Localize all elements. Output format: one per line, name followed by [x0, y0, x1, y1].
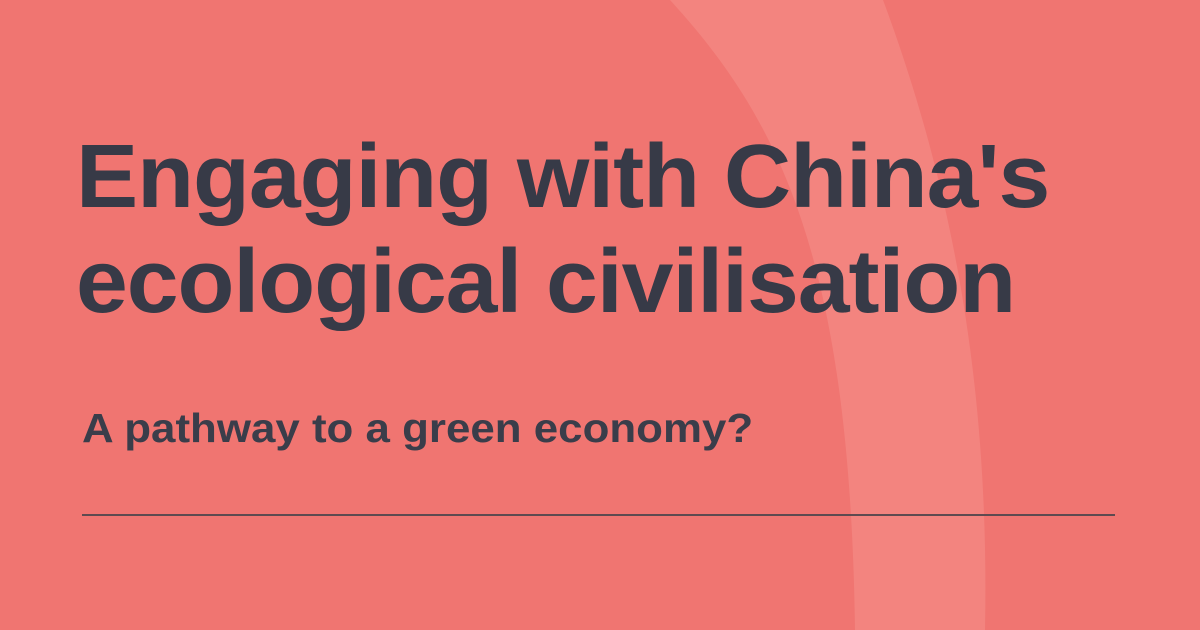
title: ecological civilisation	[76, 232, 1015, 332]
divider line	[82, 514, 1115, 516]
title	[76, 127, 1049, 332]
title: Engaging with China's	[76, 127, 1049, 227]
subtitle: A pathway to a green economy?	[82, 405, 753, 451]
